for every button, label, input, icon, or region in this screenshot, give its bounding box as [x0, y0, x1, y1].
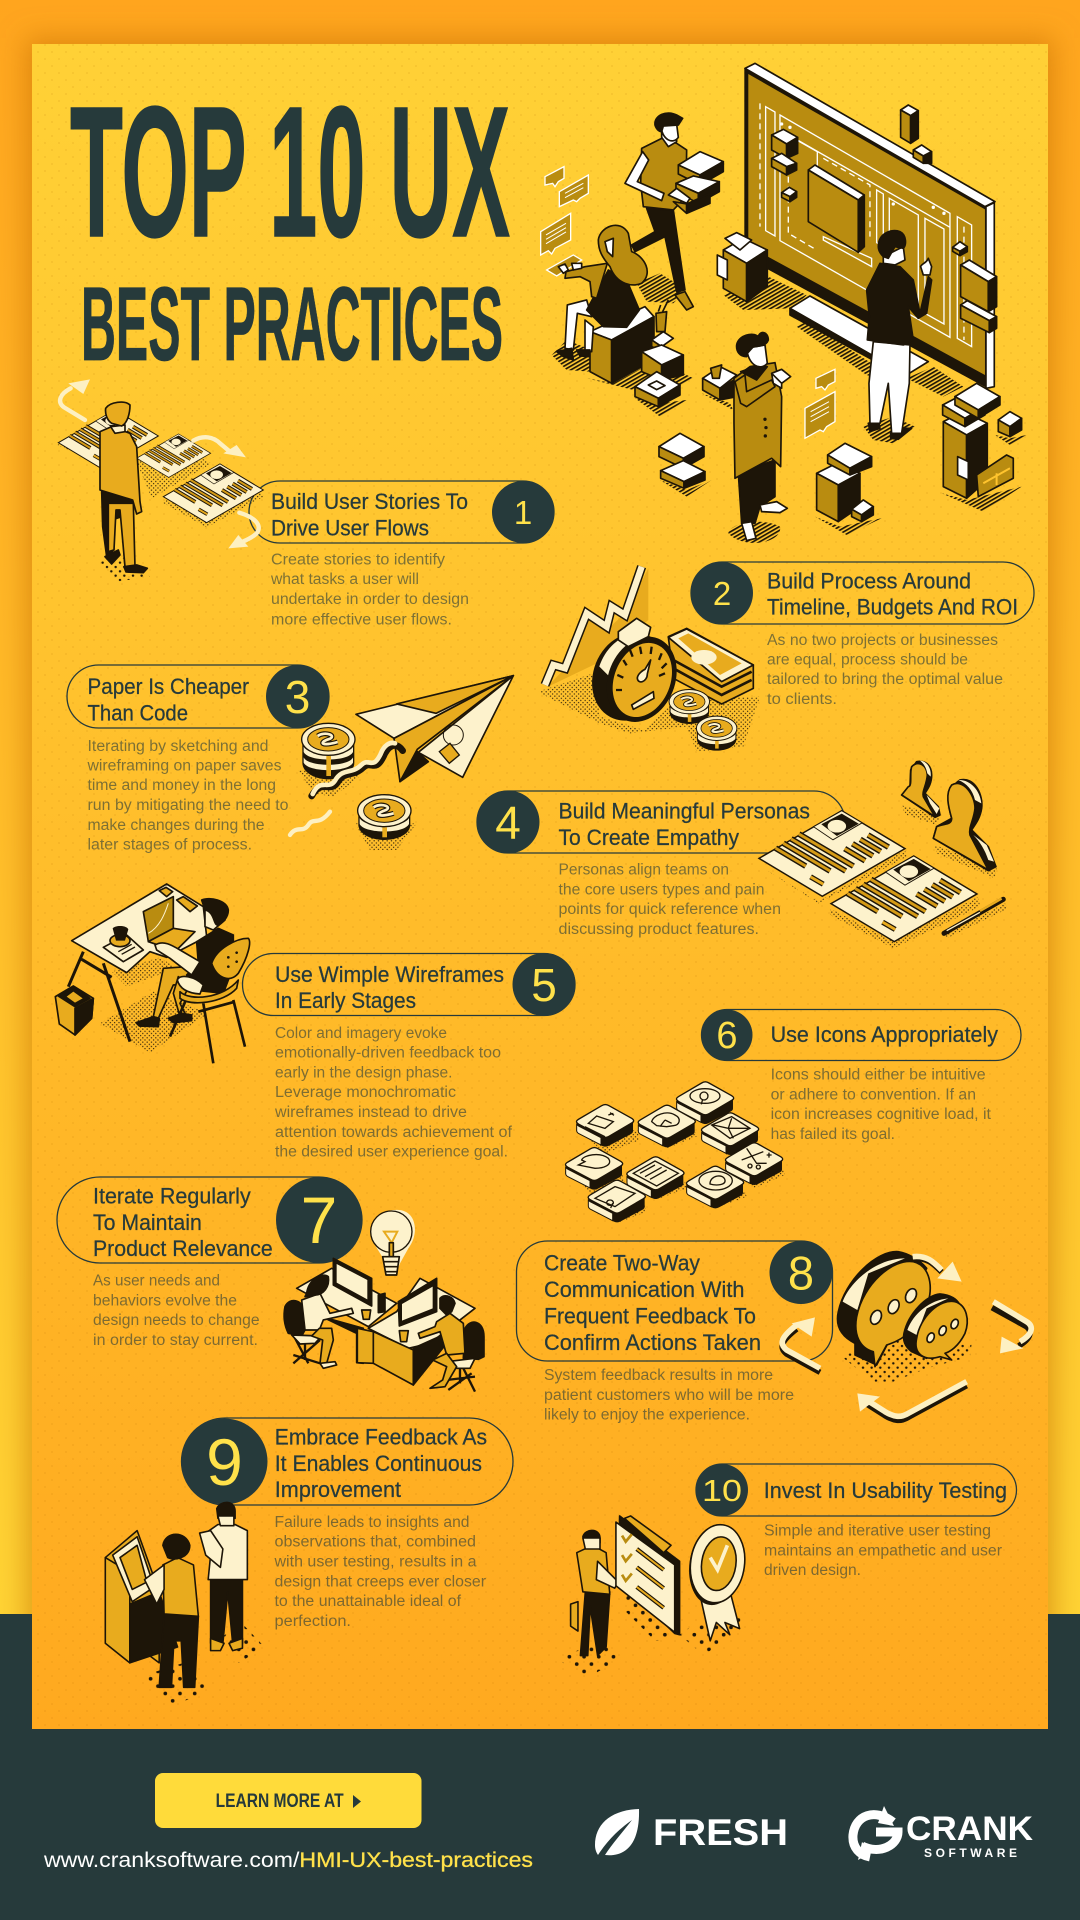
body 6: has failed its goal.: [771, 1126, 895, 1143]
heading 8: Confirm Actions Taken: [544, 1330, 761, 1355]
body 3: wireframing on paper saves: [86, 758, 282, 775]
item 8: feedback: [516, 1241, 1031, 1424]
body 1: Create stories to identify: [271, 552, 445, 568]
body 9: [273, 1514, 486, 1630]
body 5: Leverage monochromatic: [275, 1084, 456, 1101]
body 6: or adhere to convention. If an: [771, 1087, 976, 1104]
heading 8: Create Two-Way: [544, 1251, 701, 1276]
heading 4: [558, 798, 810, 850]
heading 2: [767, 568, 1018, 620]
heading 2: Timeline, Budgets And ROI: [767, 595, 1018, 620]
illustration: paper plane and coins: [290, 676, 513, 850]
heading 3: Paper Is Cheaper: [88, 674, 249, 699]
number 2: 2: [713, 575, 731, 612]
body 1: more effective user flows.: [271, 612, 452, 628]
number 4: 4: [495, 796, 521, 848]
body 9: Failure leads to insights and: [274, 1514, 470, 1531]
illustration: speech bubbles and cycle arrows: [782, 1252, 1031, 1420]
heading 9: Improvement: [275, 1477, 402, 1502]
heading 7: Product Relevance: [93, 1236, 273, 1261]
speech bubbles: [541, 167, 835, 438]
body 10: maintains an empathetic and user: [764, 1542, 1002, 1560]
item 3: paper: [67, 665, 513, 853]
body 10: [764, 1522, 1002, 1579]
body 2: are equal, process should be: [767, 652, 968, 668]
body 3: time and money in the long: [88, 777, 276, 794]
heading 5: In Early Stages: [275, 988, 416, 1013]
body 7: As user needs and: [93, 1273, 220, 1290]
body 5: attention towards achievement of: [275, 1124, 513, 1141]
body 8: System feedback results in more: [544, 1367, 773, 1384]
body 3: run by mitigating the need to: [88, 797, 288, 814]
body 5: emotionally-driven feedback too: [275, 1044, 501, 1062]
man at board: [867, 231, 932, 439]
body 5: early in the design phase.: [275, 1064, 452, 1082]
logo: Fresh: FRESH: [653, 1812, 788, 1853]
heading 1: Drive User Flows: [271, 516, 429, 540]
heading 9: Embrace Feedback As: [275, 1424, 487, 1450]
body 7: in order to stay current.: [93, 1332, 258, 1349]
body 9: perfection.: [274, 1613, 351, 1630]
heading 4: Build Meaningful Personas: [558, 798, 810, 823]
body 4: [558, 862, 781, 938]
item 9: embrace feedback: [105, 1418, 513, 1707]
body 1: what tasks a user will: [270, 571, 419, 588]
illustration: checklist, badge and person: [557, 1516, 750, 1678]
body 4: points for quick reference when: [558, 901, 781, 918]
title: [70, 69, 510, 383]
number 4: [476, 790, 540, 854]
seated woman: [557, 225, 647, 360]
item 1: user stories: [57, 379, 554, 628]
number 5: 5: [531, 959, 557, 1011]
man in coat: [734, 333, 791, 541]
heading 7: [93, 1184, 273, 1261]
body 8: likely to enjoy the experience.: [544, 1407, 750, 1424]
illustration: persona sheets and busts: [759, 761, 1008, 948]
body 2: tailored to bring the optimal value: [767, 671, 1003, 688]
number 7: 7: [301, 1183, 337, 1257]
item 7: iterate: [57, 1177, 484, 1392]
heading pill 3: [67, 665, 329, 728]
illustration: app icon tiles: [565, 1082, 785, 1223]
body 1: undertake in order to design: [271, 591, 469, 608]
body 9: observations that, combined: [274, 1534, 476, 1550]
number 7: [276, 1177, 362, 1263]
body 9: to the unattainable ideal of: [274, 1593, 462, 1610]
heading 9: It Enables Continuous: [275, 1451, 482, 1476]
heading pill 8: [516, 1241, 832, 1361]
footer band: [0, 1614, 1080, 1920]
heading 1: Build User Stories To: [271, 489, 468, 514]
body 2: As no two projects or businesses: [767, 632, 998, 649]
heading pill 6: [702, 1010, 1021, 1060]
number 10: 10: [702, 1473, 742, 1508]
number 1: 1: [514, 494, 532, 531]
logo: Crank Software: CRANK: [906, 1810, 1033, 1848]
body 6: Icons should either be intuitive: [771, 1067, 986, 1084]
heading 1: [271, 489, 468, 540]
number 5: [512, 953, 576, 1016]
body 9: with user testing, results in a: [273, 1554, 477, 1570]
body 10: driven design.: [764, 1562, 861, 1579]
body 2: [767, 632, 1003, 708]
body 8: [544, 1367, 794, 1424]
body 4: discussing product features.: [558, 921, 759, 938]
heading 10: Invest In Usability Testing: [764, 1478, 1007, 1503]
body 9: design that creeps ever closer: [274, 1574, 486, 1590]
body 7: behaviors evolve the: [93, 1292, 237, 1309]
body 6: icon increases cognitive load, it: [771, 1106, 992, 1123]
item 5: wireframes: [55, 884, 576, 1161]
body 3: [86, 738, 288, 853]
heading pill 2: [691, 562, 1034, 624]
heading pill 5: [242, 954, 575, 1016]
footer: learn more button: LEARN MORE AT: [216, 1791, 344, 1812]
heading 3: Than Code: [88, 700, 188, 725]
number 10: [696, 1464, 748, 1516]
illustration: person with story cards: [57, 379, 265, 582]
heading 8: [544, 1251, 761, 1355]
illustration: designer at desk: [55, 884, 250, 1063]
item 10: usability testing: [557, 1464, 1016, 1678]
item 6: icons: [565, 1010, 1021, 1223]
illustration: kiosk and two people: [105, 1502, 264, 1707]
body 5: wireframes instead to drive: [274, 1104, 467, 1121]
heading pill 9: [182, 1418, 513, 1505]
logo: Crank Software: SOFTWARE: [924, 1846, 1017, 1860]
number 3: [266, 665, 329, 728]
number 8: [770, 1241, 832, 1304]
footer: learn more button: [155, 1773, 422, 1828]
number 6: [702, 1010, 752, 1060]
body 1: [270, 552, 469, 628]
heading pill 1: [249, 481, 554, 543]
body 5: Color and imagery evoke: [275, 1025, 447, 1042]
number 9: 9: [206, 1425, 243, 1499]
heading 7: Iterate Regularly: [93, 1184, 251, 1209]
heading 2: Build Process Around: [767, 568, 971, 594]
number 3: 3: [285, 671, 310, 723]
footer: url: www.cranksoftware.com/ HMI-UX-best-practices: [43, 1848, 533, 1872]
heading 9: [275, 1424, 487, 1502]
logo: Crank Software: [853, 1806, 1033, 1860]
heading 8: Communication With: [544, 1277, 744, 1302]
body 5: the desired user experience goal.: [275, 1144, 508, 1161]
body 4: Personas align teams on: [558, 862, 729, 879]
heading pill 10: [696, 1464, 1016, 1516]
heading pill 7: [57, 1177, 362, 1263]
item 4: personas: [476, 761, 1008, 948]
body 10: Simple and iterative user testing: [764, 1522, 991, 1540]
heading pill 4: [477, 791, 845, 853]
heading 5: Use Wimple Wireframes: [275, 962, 504, 987]
body 7: [93, 1273, 260, 1349]
stacked boxes: [590, 233, 1022, 522]
body 6: [771, 1067, 992, 1143]
infographic canvas: TOP 10 UX: [70, 69, 510, 276]
heading 5: [275, 962, 504, 1013]
body 7: design needs to change: [93, 1312, 260, 1329]
body 8: patient customers who will be more: [544, 1387, 794, 1404]
logo: Fresh: [595, 1809, 788, 1855]
heading 8: Frequent Feedback To: [544, 1304, 756, 1329]
body 2: to clients.: [767, 691, 837, 708]
body 3: make changes during the: [88, 817, 264, 834]
number 1: [492, 481, 554, 543]
body 3: Iterating by sketching and: [88, 738, 268, 755]
wireframe board: [744, 63, 997, 388]
heading 3: [88, 674, 249, 725]
number 2: [691, 562, 753, 624]
body 3: later stages of process.: [88, 836, 252, 853]
illustration: chart, gauge, money and coins: [538, 567, 760, 752]
number 8: 8: [788, 1246, 814, 1300]
heading 7: To Maintain: [93, 1210, 202, 1235]
body 4: the core users types and pain: [558, 881, 764, 898]
hero illustration: team at wireframe board: [541, 63, 1027, 543]
number 9: [182, 1418, 268, 1504]
illustration: two workstations and lightbulb: [284, 1210, 484, 1392]
number 6: 6: [716, 1015, 738, 1057]
heading 4: To Create Empathy: [558, 825, 740, 850]
infographic canvas: BEST PRACTICES: [81, 266, 503, 383]
item 2: process: [538, 562, 1034, 752]
body 5: [274, 1025, 513, 1161]
person carrying boxes: [625, 113, 723, 310]
heading 6: Use Icons Appropriately: [771, 1022, 999, 1047]
